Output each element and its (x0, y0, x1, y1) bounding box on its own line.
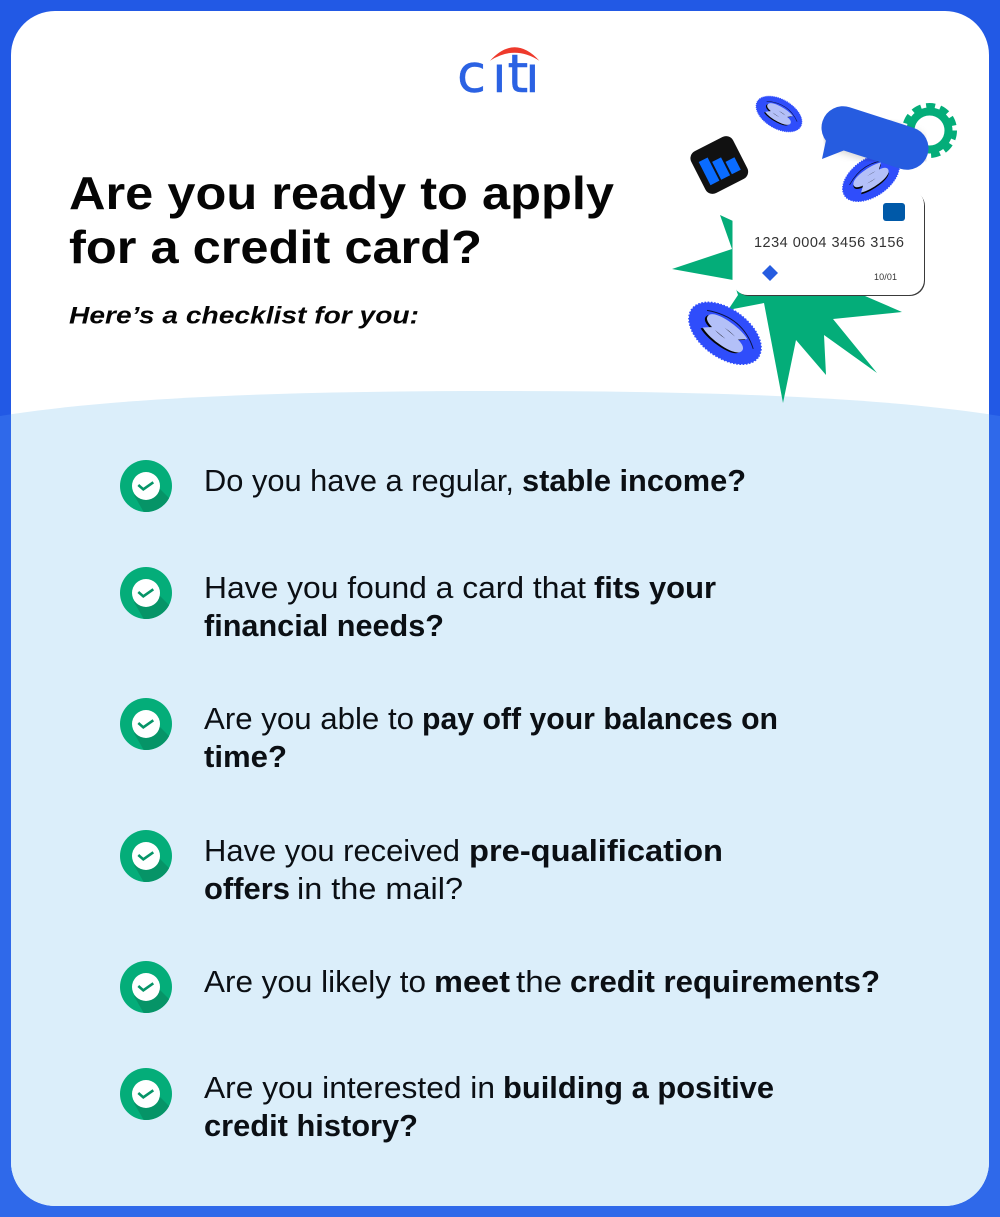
text 6: building a positive (503, 1070, 774, 1105)
light blue checklist panel (0, 391, 1000, 1217)
text 3: time? (204, 739, 287, 774)
credit card (732, 190, 925, 296)
icon: check (120, 698, 176, 754)
item 2 (120, 567, 716, 643)
item 3 (120, 698, 778, 774)
icon: check (120, 1068, 176, 1124)
text 6 (204, 1070, 774, 1143)
text 4: offers (204, 871, 290, 906)
text 5: meet (434, 964, 510, 999)
text 3: pay off your balances on (422, 701, 778, 736)
card diamond (762, 265, 778, 281)
item 4 (120, 830, 723, 906)
text 5: Are you likely to (204, 964, 426, 999)
icon: check (120, 830, 176, 886)
item 1 (120, 460, 746, 516)
logo: citi (457, 44, 540, 105)
title (69, 167, 614, 273)
text 2: financial needs? (204, 608, 444, 643)
subtitle: Here’s a checklist for you: (69, 302, 419, 330)
icon: check (120, 961, 176, 1017)
text 6: Are you interested in (204, 1070, 495, 1105)
text 2 (204, 570, 716, 643)
text 4: Have you received (204, 833, 460, 868)
text 4: pre-qualification (469, 833, 723, 868)
lower page border tint (0, 391, 1000, 1217)
speech bubble (822, 128, 907, 159)
card chip (883, 203, 905, 221)
icon: check (120, 460, 176, 516)
text 2: Have you found a card that (204, 570, 586, 605)
item 5 (120, 961, 880, 1017)
coin middle (834, 144, 908, 211)
text 1 (204, 463, 746, 498)
gear (904, 106, 954, 156)
text 2: fits your (594, 570, 716, 605)
text 1: stable income? (522, 463, 746, 498)
item 6 (120, 1068, 774, 1143)
text 4: in the mail? (297, 871, 463, 906)
text 3 (204, 701, 778, 774)
text 6: credit history? (204, 1108, 418, 1143)
logo arc (490, 47, 539, 61)
title: for a credit card? (69, 221, 482, 273)
coin small top (750, 89, 808, 139)
text 5 (204, 964, 880, 999)
green starburst (672, 215, 902, 403)
card expiry: 10/01 (874, 272, 897, 282)
checklist (120, 460, 880, 1143)
title: Are you ready to apply (69, 167, 614, 219)
logo wordmark: citi (457, 44, 540, 105)
icon: bar chart tile (688, 133, 751, 197)
text 5: credit requirements? (570, 964, 880, 999)
text 3: Are you able to (204, 701, 414, 736)
text 5: the (516, 964, 562, 999)
text 1: Do you have a regular, (204, 463, 514, 498)
text 4 (204, 833, 723, 906)
coin large (678, 290, 772, 377)
icon: check (120, 567, 176, 623)
illustration: credit card burst (672, 89, 954, 403)
card number: 1234 0004 3456 3156 (754, 235, 904, 251)
